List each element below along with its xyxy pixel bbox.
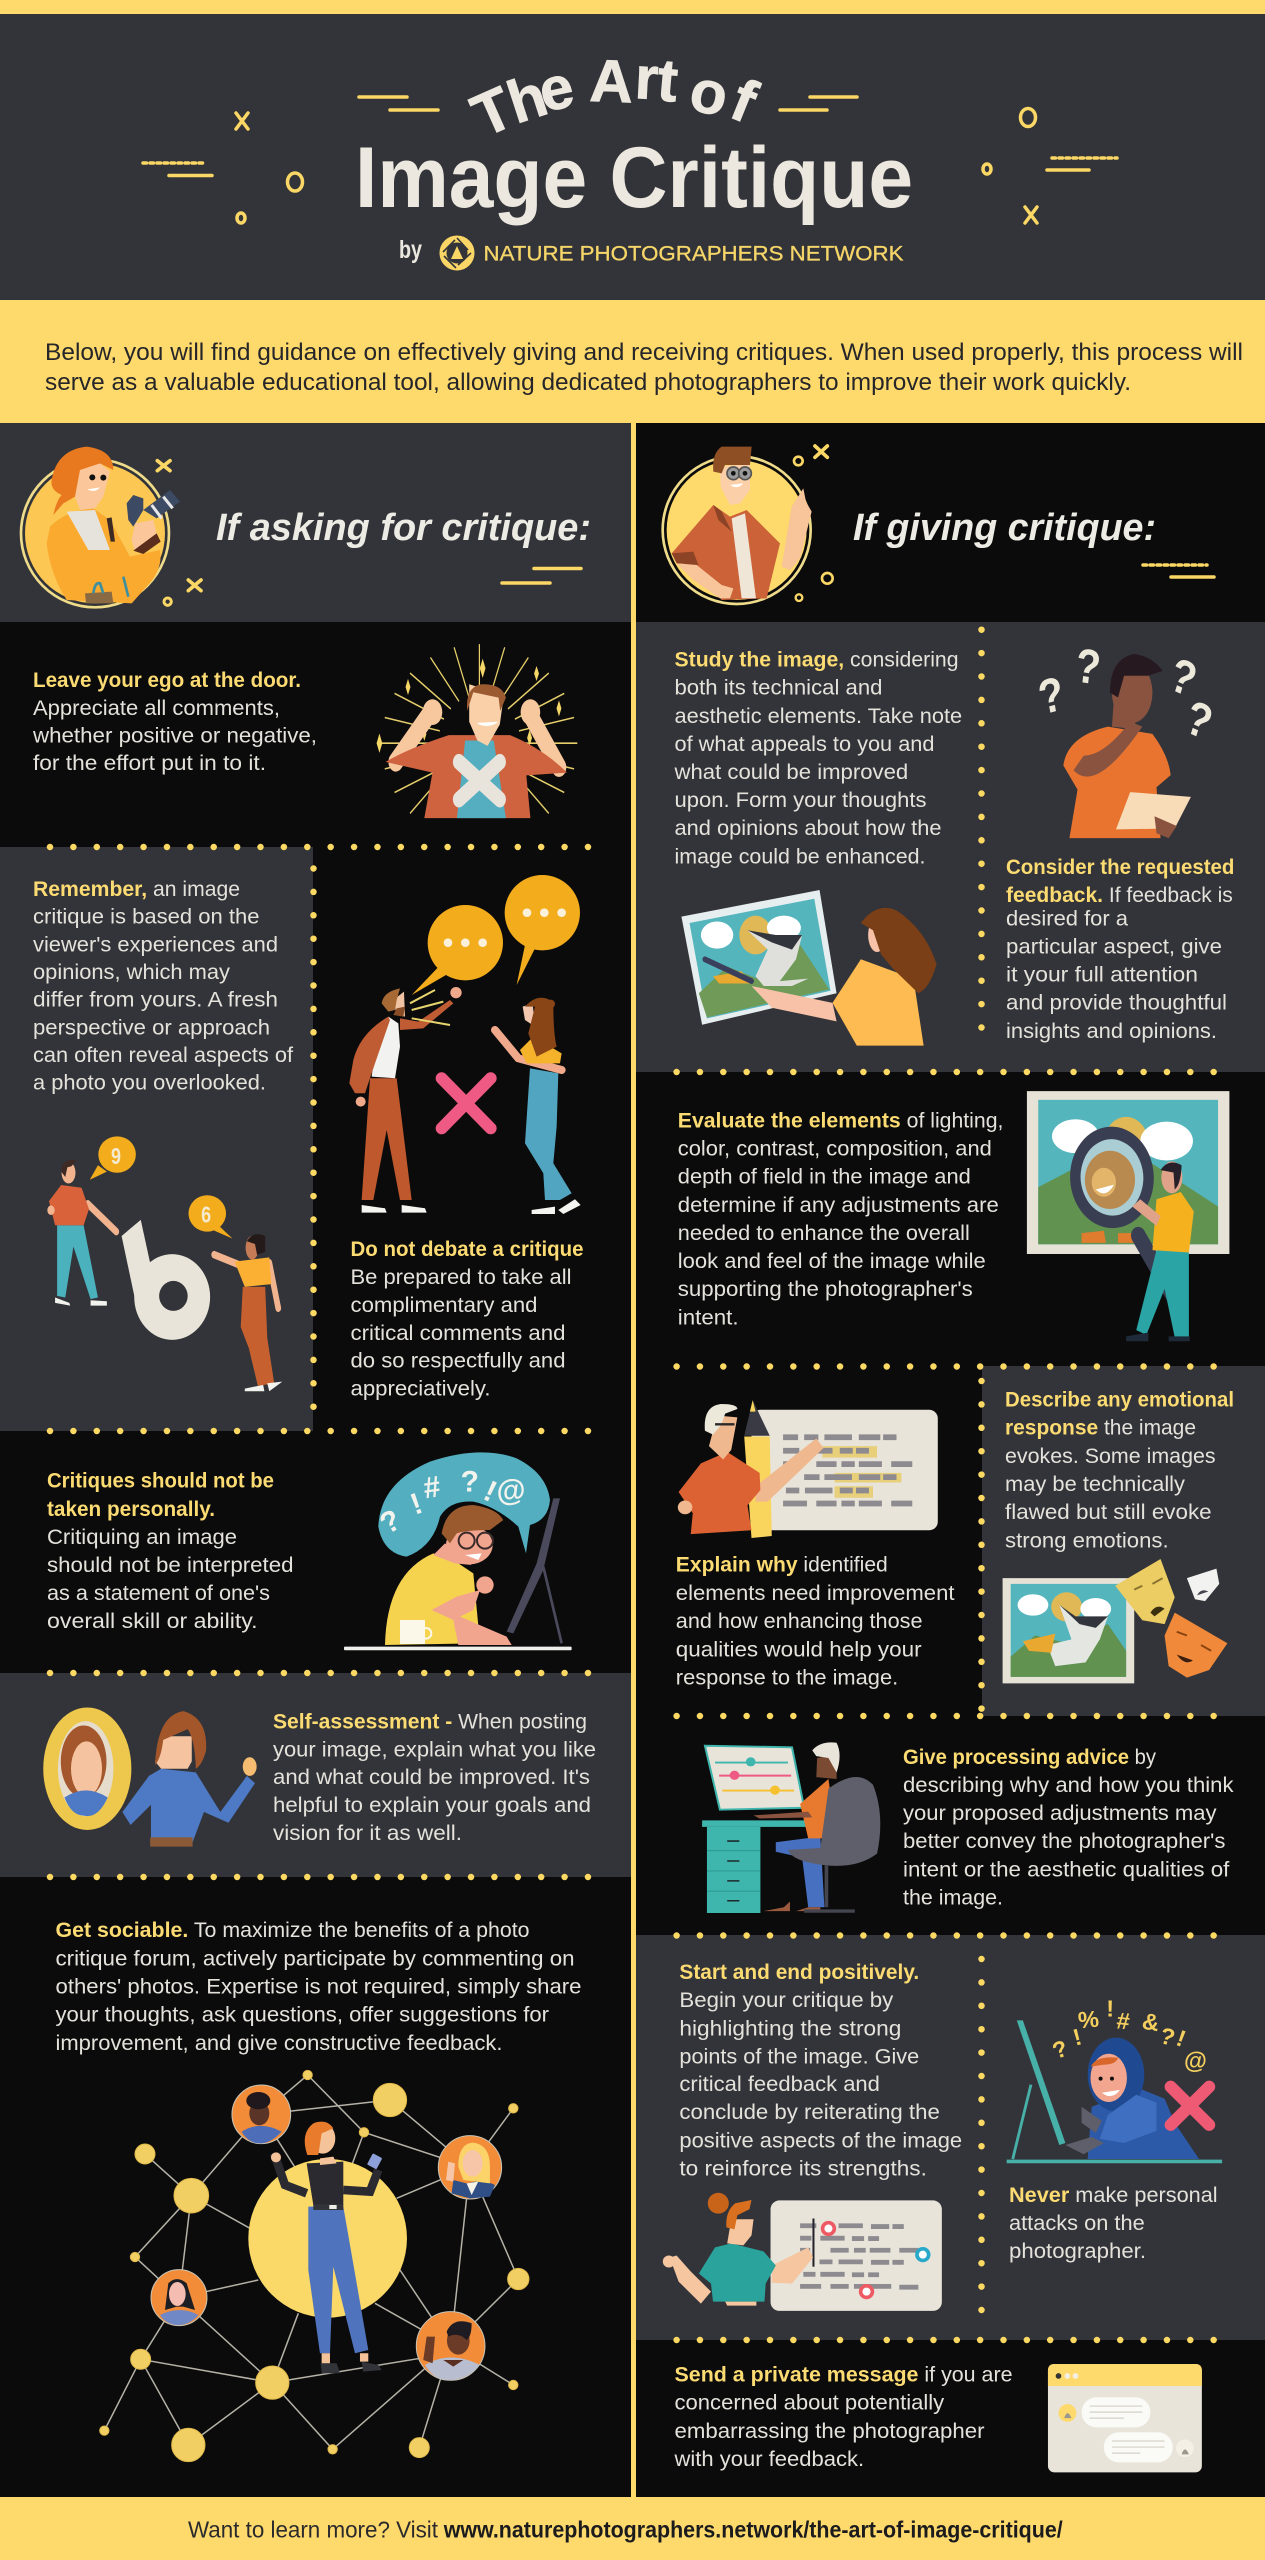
text: send a private message: concerned about potentially	[674, 2391, 944, 2415]
illustration: woman annotating a document	[663, 2193, 942, 2311]
text: study the image: and opinions about how the	[674, 816, 942, 840]
text: evaluate the elements: intent.	[678, 1305, 739, 1329]
text: do not debate: do so respectfully and	[350, 1348, 566, 1372]
text: critiques not personal: taken personally.	[47, 1497, 215, 1521]
illustration: two people reading a 6 or a 9	[47, 1136, 282, 1391]
text: give processing advice: your proposed adjustments may	[903, 1801, 1217, 1825]
text: evaluate the elements: look and feel of the image while	[678, 1249, 986, 1273]
column divider	[631, 423, 636, 2497]
panel: intro band: Below, you will find guidance on effectively giving and receiving critiques. When used properly, this process will	[45, 339, 1243, 366]
text: never make personal attacks	[1009, 2183, 1218, 2263]
text: explain why	[676, 1553, 955, 1690]
text: consider the requested feedback: insights and opinions.	[1006, 1019, 1217, 1043]
title: The Art of: The Art of	[462, 44, 767, 150]
text: consider the requested feedback: feedback. If feedback is	[1006, 883, 1233, 907]
text: study the image: aesthetic elements. Take note	[674, 704, 962, 728]
illustration: angry man at computer: ?!#?!@	[374, 1466, 527, 1541]
text: consider the requested feedback: and provide thoughtful	[1006, 991, 1227, 1015]
text: remember: a photo you overlooked.	[33, 1071, 266, 1095]
text: consider the requested feedback: particular aspect, give	[1006, 934, 1222, 958]
illustration: person at desk adjusting sliders	[702, 1742, 880, 1913]
text: get sociable	[56, 1918, 582, 2055]
text: evaluate the elements: determine if any adjustments are	[678, 1193, 999, 1217]
text: start and end positively: Start and end positively.	[679, 1960, 919, 1984]
text: remember: viewer's experiences and	[33, 932, 278, 956]
text: start and end positively: points of the image. Give	[679, 2044, 919, 2068]
illustration: man with magnifier and framed picture	[1027, 1091, 1229, 1341]
text: start and end positively: to reinforce its strengths.	[679, 2156, 927, 2180]
illustration: man thinking with tablet: ?	[1034, 667, 1068, 725]
text: remember: perspective or approach	[33, 1015, 270, 1039]
footer: Want to learn more? Visit	[188, 2516, 439, 2542]
text: evaluate the elements: supporting the photographer's	[678, 1277, 973, 1301]
panel: left column backgrounds	[0, 423, 631, 2497]
text: leave your ego: whether positive or negative,	[32, 724, 317, 748]
text: study the image	[673, 648, 962, 868]
text: evaluate the elements: needed to enhance the overall	[678, 1221, 970, 1245]
text: critiques not personal: as a statement of one's	[47, 1581, 270, 1605]
text: explain why: Explain why identified	[676, 1553, 888, 1577]
panel: right column backgrounds	[636, 423, 1265, 2497]
text: send a private message: embarrassing the photographer	[674, 2419, 984, 2443]
text: give processing advice: describing why and how you think	[903, 1773, 1234, 1797]
text: do not debate: Do not debate a critique	[350, 1237, 584, 1261]
byline: by	[399, 236, 422, 264]
dotted dividers	[50, 630, 1214, 2340]
illustration: man thinking with tablet: ?	[1073, 639, 1103, 696]
text: never make personal attacks: attacks on the	[1009, 2211, 1145, 2235]
panel: intro band: serve as a valuable educational tool, allowing dedicated photographers to improve their work quickly.	[45, 369, 1131, 396]
text: evaluate the elements: Evaluate the elements of lighting,	[678, 1108, 1003, 1132]
text: get sociable: improvement, and give constructive feedback.	[56, 2031, 502, 2055]
panel: intro band	[0, 300, 1265, 423]
text: critiques not personal	[47, 1469, 294, 1633]
icon: man with glasses	[663, 446, 833, 604]
illustration: two people arguing	[349, 875, 581, 1214]
text: remember	[33, 877, 293, 1095]
text: send a private message	[673, 2363, 1012, 2471]
icon: woman with camera	[21, 447, 201, 607]
illustration: two people reading a 6 or a 9: 9	[111, 1144, 121, 1170]
illustration: man presenting on board with pencil	[678, 1400, 938, 1538]
illustration: hooded troll at computer	[1007, 1995, 1222, 2161]
text: consider the requested feedback	[1006, 855, 1234, 1043]
illustration: woman inspecting photo	[681, 890, 937, 1046]
text: consider the requested feedback: it your full attention	[1006, 963, 1198, 987]
central woman	[271, 2122, 382, 2373]
text: evaluate the elements: depth of field in the image and	[678, 1165, 971, 1189]
text: get sociable: others' photos. Expertise is not required, simply share	[56, 1974, 582, 1998]
text: give processing advice: intent or the aesthetic qualities of	[903, 1858, 1229, 1882]
text: leave your ego: for the effort put in to it.	[33, 751, 266, 775]
text: remember: differ from yours. A fresh	[33, 988, 278, 1012]
text: self-assessment: vision for it as well.	[273, 1821, 462, 1845]
text: give processing advice: better convey the photographer's	[903, 1829, 1225, 1853]
illustration: hooded troll at computer: ?!%!#&?!@	[1049, 1995, 1207, 2074]
text: describe any emotional response	[1005, 1388, 1234, 1552]
text: consider the requested feedback: desired for a	[1006, 906, 1128, 930]
text: leave your ego: Appreciate all comments,	[33, 696, 280, 720]
text: describe any emotional response: response the image	[1005, 1416, 1196, 1440]
text: describe any emotional response: evokes. Some images	[1005, 1444, 1216, 1468]
text: explain why: response to the image.	[676, 1666, 898, 1690]
text: describe any emotional response: flawed but still evoke	[1005, 1500, 1212, 1524]
text: study the image: image could be enhanced.	[674, 844, 926, 868]
text: study the image: Study the image, considering	[674, 648, 958, 672]
text: start and end positively: conclude by reiterating the	[679, 2100, 940, 2124]
text: critiques not personal: Critiquing an image	[47, 1525, 237, 1549]
text: give processing advice	[903, 1745, 1234, 1910]
text: self-assessment: Self-assessment - When posting	[273, 1709, 587, 1733]
text: do not debate: critical comments and	[350, 1321, 566, 1345]
text: study the image: of what appeals to you and	[674, 732, 934, 756]
text: explain why: elements need improvement	[676, 1581, 955, 1605]
text: start and end positively: Begin your critique by	[679, 1988, 894, 2012]
text: leave your ego: Leave your ego at the door.	[33, 668, 301, 692]
text: get sociable: Get sociable. To maximize the benefits of a photo	[56, 1918, 530, 1942]
text: send a private message: Send a private message if you are	[674, 2363, 1012, 2387]
text: consider the requested feedback: Consider the requested	[1006, 855, 1234, 879]
text: get sociable: critique forum, actively participate by commenting on	[56, 1946, 574, 1970]
footer	[0, 2497, 1265, 2560]
text: describe any emotional response: may be technically	[1005, 1472, 1185, 1496]
text: study the image: what could be improved	[673, 760, 908, 784]
footer: www.naturephotographers.network/the-art-of-image-critique/	[443, 2516, 1063, 2542]
text: give processing advice: the image.	[903, 1886, 1003, 1910]
text: self-assessment: your image, explain what you like	[273, 1737, 596, 1761]
text: leave your ego	[32, 668, 317, 775]
text: start and end positively	[679, 1960, 962, 2180]
illustration: man thinking with tablet: ?	[1164, 648, 1202, 708]
text: never make personal attacks: photographer.	[1009, 2239, 1146, 2263]
text: remember: opinions, which may	[33, 960, 230, 984]
text: study the image: upon. Form your thoughts	[674, 788, 926, 812]
avatars	[160, 2092, 495, 2380]
text: start and end positively: positive aspects of the image	[679, 2128, 962, 2152]
text: explain why: qualities would help your	[676, 1638, 922, 1662]
section heading: asking for critique	[21, 447, 591, 607]
text: give processing advice: Give processing advice by	[903, 1745, 1156, 1769]
illustration: man pointing at himself with rays	[377, 644, 577, 818]
heading text: If asking for critique:	[216, 507, 591, 549]
text: critiques not personal: should not be interpreted	[47, 1553, 294, 1577]
text: remember: critique is based on the	[33, 905, 260, 929]
text: describe any emotional response: strong emotions.	[1005, 1528, 1169, 1552]
illustration: man thinking with tablet	[1034, 639, 1218, 838]
text: evaluate the elements	[678, 1108, 1003, 1329]
text: remember: Remember, an image	[33, 877, 240, 901]
illustration: social network with central woman	[100, 2070, 529, 2462]
text: critiques not personal: Critiques should not be	[47, 1469, 274, 1493]
text: send a private message: with your feedback.	[673, 2447, 864, 2471]
illustration: two people reading a 6 or a 9: 6	[201, 1202, 211, 1228]
decorative dashes and marks	[143, 97, 1117, 223]
panel: header	[0, 0, 1265, 300]
illustration: chat window	[1048, 2364, 1202, 2472]
text: start and end positively: highlighting the strong	[679, 2016, 901, 2040]
title: Image Critique: Image Critique	[355, 130, 913, 226]
text: self-assessment: helpful to explain your goals and	[273, 1793, 591, 1817]
text: remember: can often reveal aspects of	[33, 1043, 293, 1067]
text: self-assessment	[273, 1709, 596, 1845]
text: study the image: both its technical and	[674, 676, 882, 700]
text: evaluate the elements: color, contrast, composition, and	[678, 1137, 992, 1161]
text: explain why: and how enhancing those	[676, 1609, 922, 1633]
illustration: woman with portrait mirror	[43, 1707, 257, 1847]
text: do not debate	[350, 1237, 584, 1400]
text: do not debate: Be prepared to take all	[350, 1265, 572, 1289]
text: self-assessment: and what could be improved. It's	[273, 1765, 590, 1789]
text: never make personal attacks: Never make personal	[1009, 2183, 1218, 2207]
byline: NATURE PHOTOGRAPHERS NETWORK	[484, 243, 904, 266]
illustration: man thinking with tablet: ?	[1180, 691, 1218, 751]
byline	[399, 236, 904, 268]
illustration: angry man at computer	[344, 1452, 572, 1650]
text: start and end positively: critical feedback and	[679, 2072, 880, 2096]
heading text: If giving critique:	[853, 507, 1156, 549]
text: do not debate: complimentary and	[350, 1293, 538, 1317]
section heading: giving critique	[663, 446, 1214, 604]
text: critiques not personal: overall skill or ability.	[47, 1609, 258, 1633]
text: describe any emotional response: Describe any emotional	[1005, 1388, 1234, 1412]
text: get sociable: your thoughts, ask questions, offer suggestions for	[56, 2003, 549, 2027]
illustration: photo and theater masks	[1003, 1559, 1227, 1683]
text: do not debate: appreciatively.	[350, 1376, 490, 1400]
